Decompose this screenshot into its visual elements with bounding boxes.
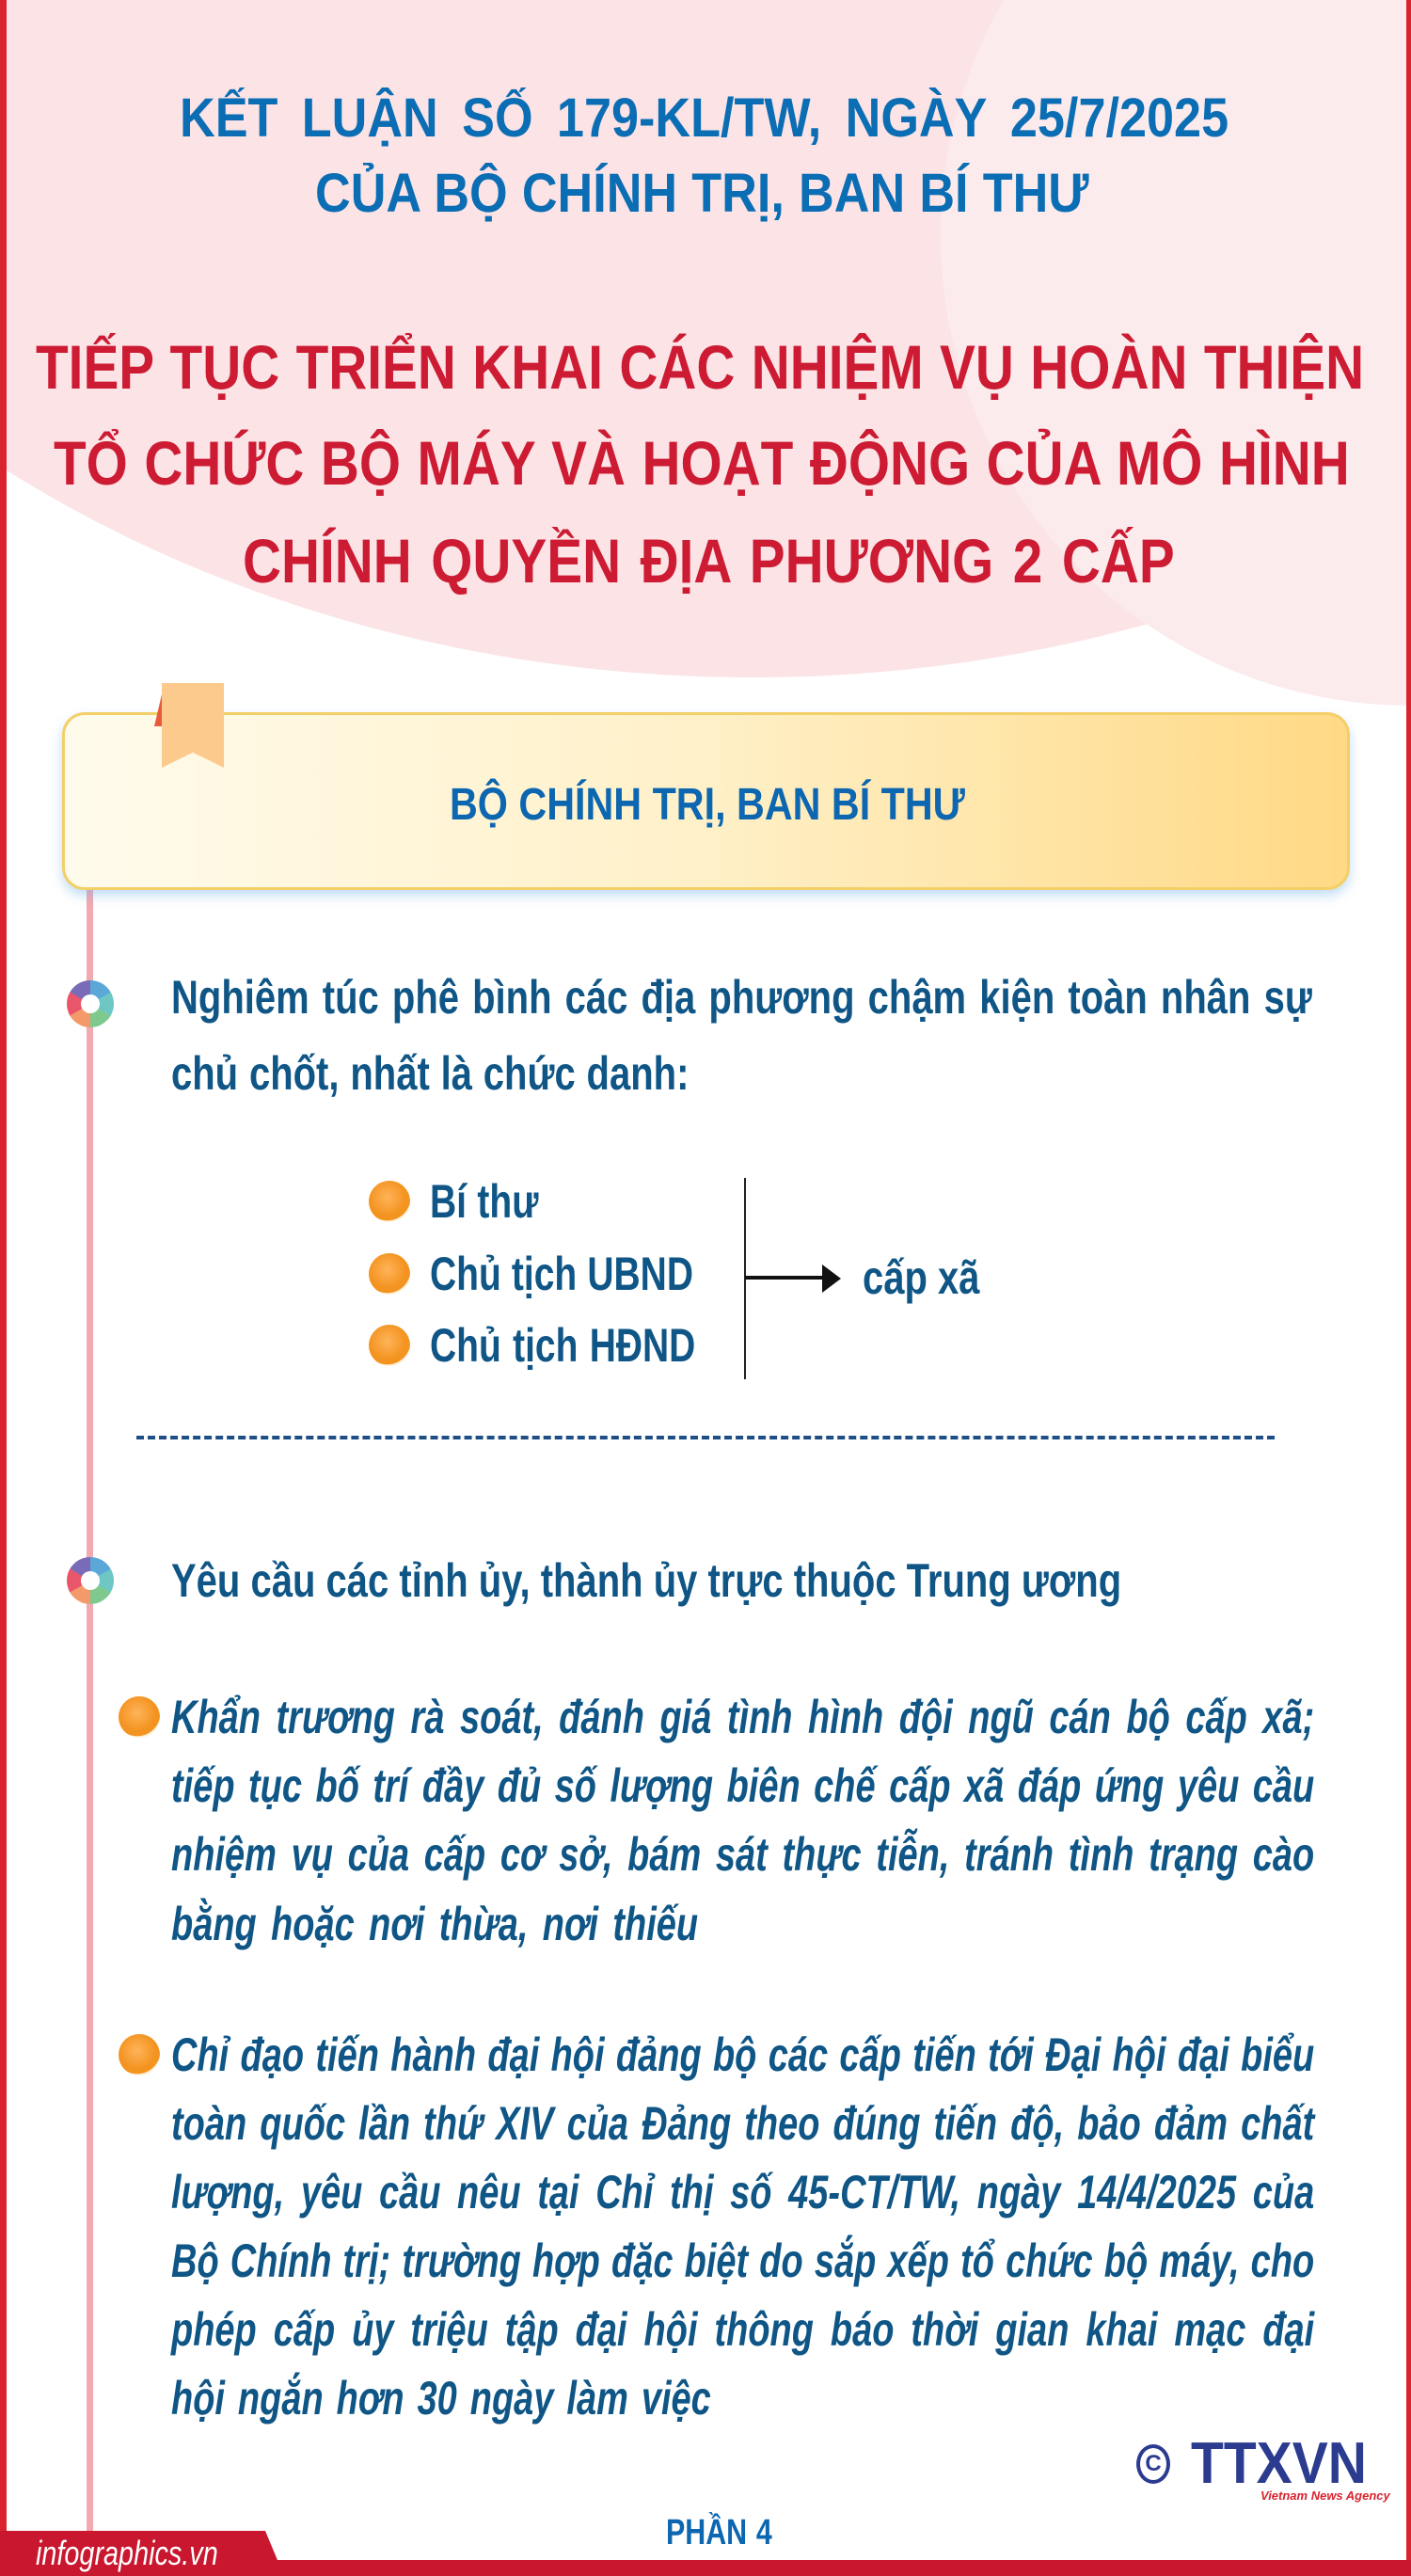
bullet paragraph 2: Chỉ đạo tiến hành đại hội đảng bộ các cấp tiến tới Đại hội đại biểu xyxy=(171,2028,1314,2081)
left red border xyxy=(0,0,7,2576)
main title line 3: CHÍNH QUYỀN ĐỊA PHƯƠNG 2 CẤP xyxy=(243,526,1175,596)
list: titles: Bí thư xyxy=(430,1175,538,1228)
bullet: Bi thu xyxy=(369,1181,410,1222)
right red border xyxy=(1406,0,1411,2576)
title: issuer: CỦA BỘ CHÍNH TRỊ, BAN BÍ THƯ xyxy=(315,163,1089,224)
text: criticism xyxy=(171,971,1312,1100)
bracket line xyxy=(744,1178,746,1379)
icon: aperture 2 xyxy=(67,1557,114,1604)
footer tab: infographics.vn: infographics.vn xyxy=(36,2534,218,2572)
bullet paragraph 2: toàn quốc lần thứ XIV của Đảng theo đúng tiến độ, bảo đảm chất xyxy=(171,2097,1314,2150)
bullet paragraph 1 xyxy=(119,1691,1314,1950)
bullet paragraph 2: phép cấp ủy triệu tập đại hội thông báo thời gian khai mạc đại xyxy=(171,2303,1314,2356)
main title line 1: TIẾP TỤC TRIỂN KHAI CÁC NHIỆM VỤ HOÀN THIỆN xyxy=(36,332,1364,402)
text: criticism: Nghiêm túc phê bình các địa phương chậm kiện toàn nhân sự xyxy=(171,971,1312,1024)
footer: part number: PHẦN 4 xyxy=(666,2513,772,2552)
logo: TTXVN xyxy=(1136,2431,1390,2503)
logo: TTXVN: C xyxy=(1145,2451,1162,2476)
bullet paragraph 2 xyxy=(119,2028,1316,2425)
bullet: Chu tich HDND xyxy=(369,1325,410,1366)
bullet paragraph 1: tiếp tục bố trí đầy đủ số lượng biên chế cấp xã đáp ứng yêu cầu xyxy=(171,1759,1314,1812)
text: criticism: chủ chốt, nhất là chức danh: xyxy=(171,1047,689,1100)
bullet: Chu tich UBND xyxy=(369,1253,410,1295)
bullet paragraph 2: hội ngắn hơn 30 ngày làm việc xyxy=(171,2372,711,2425)
bullet paragraph 2: lượng, yêu cầu nêu tại Chỉ thị số 45-CT/TW, ngày 14/4/2025 của xyxy=(171,2166,1314,2218)
bullet paragraph 2: Bộ Chính trị; trường hợp đặc biệt do sắp xếp tổ chức bộ máy, cho xyxy=(171,2234,1314,2287)
footer bar xyxy=(0,2560,1411,2576)
arrow xyxy=(745,1264,841,1293)
main title line 2: TỔ CHỨC BỘ MÁY VÀ HOẠT ĐỘNG CỦA MÔ HÌNH xyxy=(54,428,1350,498)
text: request: Yêu cầu các tỉnh ủy, thành ủy trực thuộc Trung ương xyxy=(171,1554,1121,1607)
footer tab: infographics.vn xyxy=(0,2531,277,2572)
heading text: BỘ CHÍNH TRỊ, BAN BÍ THƯ xyxy=(450,780,965,830)
title: conclusion number: KẾT LUẬN SỐ 179-KL/TW, NGÀY 25/7/2025 xyxy=(180,87,1229,149)
list: titles: Chủ tịch HĐND xyxy=(430,1319,695,1372)
list: titles: Chủ tịch UBND xyxy=(430,1248,693,1300)
dotted line xyxy=(136,1436,1275,1439)
text: cap xa: cấp xã xyxy=(863,1251,980,1304)
timeline vertical line xyxy=(87,884,93,2533)
bullet paragraph 1: bằng hoặc nơi thừa, nơi thiếu xyxy=(171,1898,698,1950)
icon: bookmark xyxy=(154,683,224,768)
icon: aperture 1 xyxy=(67,980,114,1027)
bullet paragraph 1: nhiệm vụ của cấp cơ sở, bám sát thực tiễn, tránh tình trạng cào xyxy=(171,1828,1314,1881)
logo: TTXVN: TTXVN xyxy=(1191,2431,1367,2496)
heading box: Bo Chinh tri xyxy=(62,712,1350,890)
bullet paragraph 1: Khẩn trương rà soát, đánh giá tình hình đội ngũ cán bộ cấp xã; xyxy=(171,1691,1314,1743)
background pink top xyxy=(0,0,1411,677)
logo: TTXVN: Vietnam News Agency xyxy=(1260,2489,1390,2503)
list: titles xyxy=(369,1175,695,1372)
